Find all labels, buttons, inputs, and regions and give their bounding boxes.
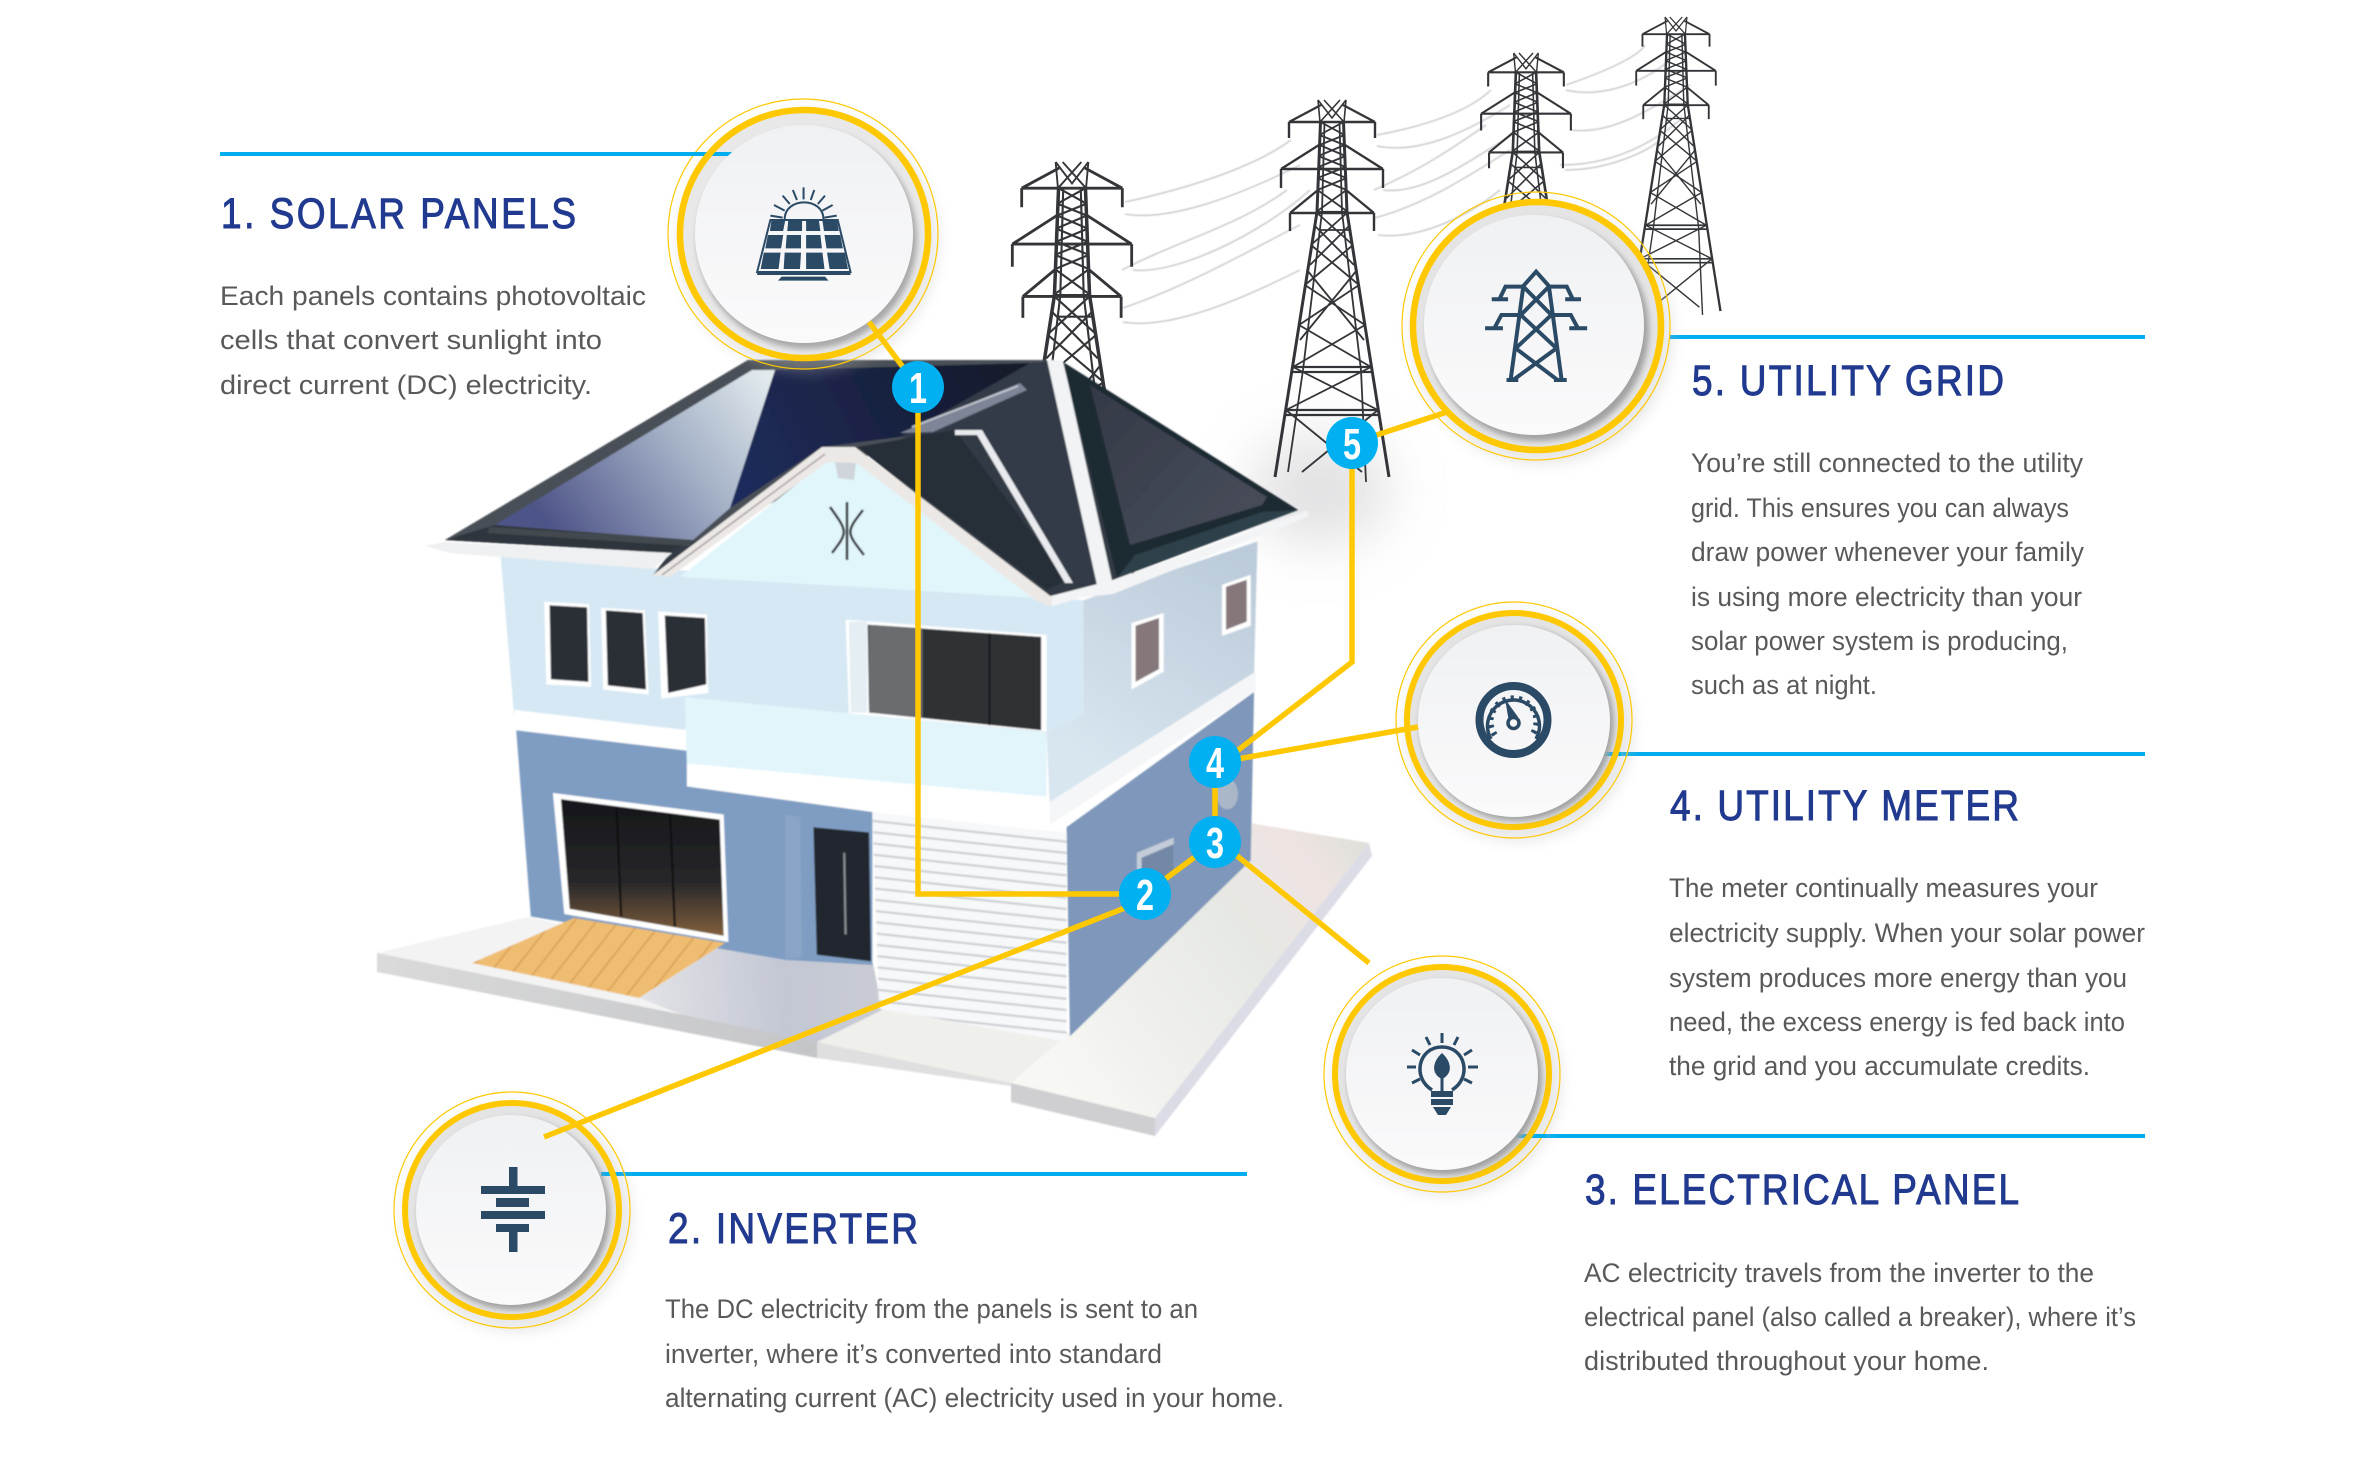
balcony bbox=[685, 697, 1046, 797]
lower window bbox=[553, 793, 728, 942]
connector lines bbox=[544, 322, 1447, 1137]
body text: grid. This ensures you can always bbox=[1691, 493, 2069, 523]
icon: gauge bbox=[1480, 686, 1548, 754]
heading rule bbox=[1669, 335, 2145, 339]
pin 4: 4 bbox=[1206, 739, 1224, 788]
body text: is using more electricity than your bbox=[1691, 582, 2082, 612]
heading rule bbox=[1601, 752, 2145, 756]
tower 2 bbox=[1275, 100, 1389, 482]
front door bbox=[813, 827, 871, 961]
balcony window bbox=[846, 620, 1046, 732]
body text: Each panels contains photovoltaic bbox=[220, 281, 646, 311]
pin 3 bbox=[1189, 816, 1241, 868]
body text: draw power whenever your family bbox=[1691, 537, 2084, 567]
icon: battery symbol bbox=[481, 1167, 545, 1252]
service box bbox=[1137, 837, 1174, 894]
upper windows bbox=[544, 602, 591, 687]
body text: cells that convert sunlight into bbox=[220, 325, 602, 355]
solar array dark section bbox=[730, 363, 1030, 508]
ground slab bbox=[377, 823, 1372, 1136]
roof valley strip bbox=[955, 430, 1073, 583]
wooden deck bbox=[472, 918, 725, 998]
pin 3: 3 bbox=[1206, 819, 1224, 868]
eaves bbox=[425, 542, 672, 569]
body text: need, the excess energy is fed back into bbox=[1669, 1007, 2125, 1037]
roof bbox=[425, 360, 1309, 606]
heading rule bbox=[220, 152, 732, 156]
heading: 1. SOLAR PANELS bbox=[221, 190, 576, 238]
central roof section bbox=[900, 362, 1097, 583]
body text: electricity supply. When your solar power bbox=[1669, 918, 2145, 948]
body text bbox=[220, 281, 646, 400]
body text: system produces more energy than you bbox=[1669, 963, 2127, 993]
pin 5 bbox=[1326, 417, 1378, 469]
house illustration bbox=[377, 360, 1372, 1136]
tower 4 bbox=[1632, 17, 1720, 315]
body text: You’re still connected to the utility bbox=[1691, 448, 2083, 478]
icon: solar panel bbox=[757, 187, 851, 281]
tower 1 bbox=[1005, 162, 1139, 617]
heading rule bbox=[601, 1172, 1247, 1176]
body text: electrical panel (also called a breaker), where it’s bbox=[1584, 1302, 2136, 1332]
right roof plane bbox=[1063, 362, 1298, 578]
hip ridge bbox=[1047, 360, 1113, 585]
pin 4 bbox=[1189, 736, 1241, 788]
upper walls bbox=[501, 557, 1083, 733]
body text: distributed throughout your home. bbox=[1584, 1346, 1989, 1376]
power line wires bbox=[1122, 45, 1690, 323]
gable trim bbox=[653, 447, 1053, 606]
circle badge bbox=[394, 1092, 631, 1331]
heading rule bbox=[1516, 1134, 2145, 1138]
meter housing bbox=[1217, 779, 1238, 809]
icon: pylon bbox=[1485, 272, 1587, 380]
body text bbox=[1584, 1258, 2136, 1376]
body text bbox=[1669, 873, 2145, 1081]
pin 1 bbox=[892, 361, 944, 413]
circle badge bbox=[1402, 192, 1672, 464]
garage shutter bbox=[872, 812, 1067, 1042]
solar array bright section bbox=[495, 370, 775, 540]
panel: 1. solar panels bbox=[220, 99, 938, 400]
heading: 2. INVERTER bbox=[668, 1205, 918, 1253]
body text: the grid and you accumulate credits. bbox=[1669, 1051, 2090, 1081]
pin 2 bbox=[1119, 868, 1171, 920]
body text: direct current (DC) electricity. bbox=[220, 370, 592, 400]
roof frame bbox=[445, 360, 1047, 553]
icon: light bulb with leaf bbox=[1407, 1033, 1478, 1115]
panel: 3. electrical panel bbox=[1324, 956, 2145, 1376]
heading: 5. UTILITY GRID bbox=[1692, 357, 2004, 405]
body text bbox=[1691, 448, 2084, 700]
body text: alternating current (AC) electricity used in your home. bbox=[665, 1383, 1284, 1413]
heading: 3. ELECTRICAL PANEL bbox=[1585, 1166, 2019, 1214]
body text: solar power system is producing, bbox=[1691, 626, 2068, 656]
body text: AC electricity travels from the inverter to the bbox=[1584, 1258, 2094, 1288]
number pins bbox=[892, 361, 1378, 920]
body text: such as at night. bbox=[1691, 670, 1877, 700]
pin 5: 5 bbox=[1343, 420, 1361, 469]
body text: inverter, where it’s converted into standard bbox=[665, 1339, 1162, 1369]
transmission towers bbox=[1005, 17, 1720, 617]
gable face bbox=[680, 460, 1036, 598]
tower 3 bbox=[1476, 53, 1576, 389]
gable ornament bbox=[830, 502, 864, 560]
body text: The meter continually measures your bbox=[1669, 873, 2098, 903]
side windows bbox=[1132, 613, 1164, 689]
heading: 4. UTILITY METER bbox=[1670, 782, 2019, 830]
pin 1: 1 bbox=[909, 364, 927, 413]
body text: The DC electricity from the panels is sent to an bbox=[665, 1294, 1198, 1324]
panel: 2. inverter bbox=[394, 1092, 1284, 1413]
pin 2: 2 bbox=[1136, 871, 1154, 920]
white floor bands bbox=[514, 710, 688, 751]
soft glow behind tower bbox=[1250, 435, 1390, 545]
circle badge bbox=[1324, 956, 1561, 1195]
lower walls bbox=[516, 729, 872, 965]
circle badge bbox=[1396, 602, 1633, 841]
panel: 5. utility grid bbox=[1402, 192, 2145, 700]
circle badge bbox=[668, 99, 938, 372]
panel: 4. utility meter bbox=[1396, 602, 2145, 1081]
body text bbox=[665, 1294, 1284, 1413]
